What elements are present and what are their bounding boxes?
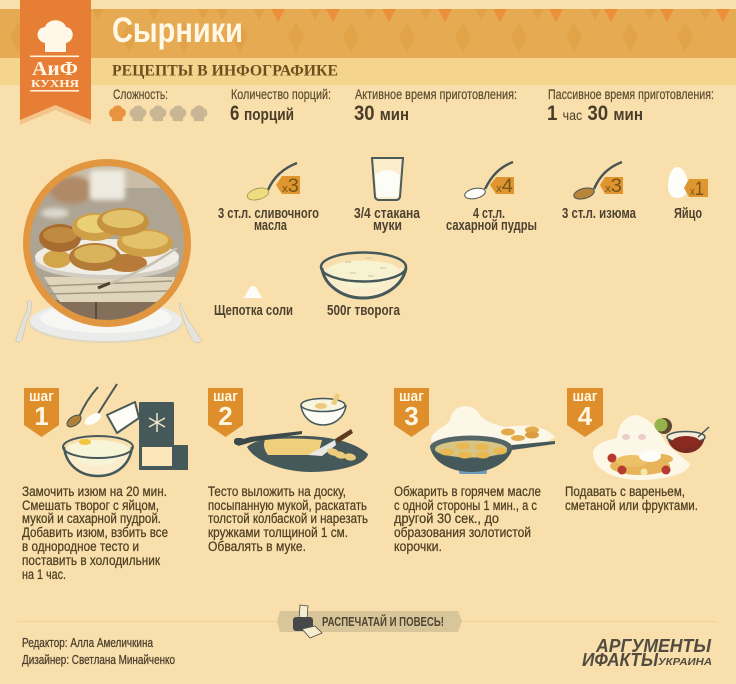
- step 4 flag: [567, 388, 603, 437]
- step 4 flag: 4: [578, 401, 593, 431]
- publisher logo: АРГУМЕНТЫ: [595, 636, 712, 656]
- step 3 text: с одной стороны 1 мин., а с: [394, 498, 537, 513]
- ingredient: bowl of cottage cheese: 500г творога: [327, 303, 401, 319]
- active time: Активное время приготовления:: [355, 86, 517, 102]
- passive time: [547, 86, 714, 125]
- step 4 text: [565, 484, 698, 513]
- ingredient: powdered sugar spoon: 4 ст.л.: [473, 206, 505, 222]
- step 3 flag: шаг: [399, 388, 424, 405]
- designer credit: Дизайнер: Светлана Минайченко: [22, 652, 175, 667]
- ingredient: butter spoon: 3 ст.л. сливочного: [218, 206, 319, 222]
- active time: 30 мин: [354, 102, 409, 125]
- step 3 text: корочки.: [394, 539, 442, 554]
- step 1 text: в однородное тесто и: [22, 539, 139, 554]
- step 1 text: [22, 484, 168, 582]
- step 4 text: сметаной или фруктами.: [565, 498, 698, 513]
- ingredient: powdered sugar spoon: x4: [496, 176, 513, 197]
- servings: 6 порций: [230, 102, 294, 125]
- logo ribbon: AiF kitchen: [20, 0, 91, 125]
- print button: [277, 605, 462, 638]
- difficulty: Сложность:: [113, 86, 168, 102]
- publisher logo: ИФАКТЫ: [582, 650, 659, 670]
- step 1 text: мукой и сахарной пудрой.: [22, 511, 161, 526]
- logo ribbon: AiF kitchen: АиФ: [32, 58, 78, 80]
- ingredient: glass of flour: муки: [373, 218, 402, 234]
- photo: syrniki on a plate in orange ring: [23, 159, 191, 330]
- step 2 flag: 2: [218, 401, 233, 431]
- passive time: 1 час 30 мин: [547, 102, 643, 125]
- step 1 text: Замочить изюм на 20 мин.: [22, 484, 167, 499]
- subtitle: РЕЦЕПТЫ В ИНФОГРАФИКЕ: [112, 62, 338, 80]
- step 2 illustration: [234, 393, 368, 472]
- servings: [230, 86, 331, 125]
- ingredient: butter spoon: масла: [254, 218, 288, 234]
- ingredient: powdered sugar spoon: сахарной пудры: [446, 218, 537, 234]
- step 2 text: посыпанную мукой, раскатать: [208, 498, 367, 513]
- ingredient: butter spoon: [218, 163, 319, 234]
- ingredient: egg: [668, 167, 708, 222]
- step 3 text: Обжарить в горячем масле: [394, 484, 541, 499]
- step 3 text: другой 30 сек., до: [394, 511, 499, 526]
- ingredient: egg: Яйцо: [674, 206, 702, 222]
- step 2 text: Обвалять в муке.: [208, 539, 306, 554]
- header band: [0, 9, 736, 85]
- step 2 flag: [208, 388, 243, 437]
- step 4 flag: шаг: [572, 388, 598, 405]
- ingredient: glass of flour: 3/4 стакана: [354, 206, 421, 222]
- step 2 text: кружками толщиной 1 см.: [208, 525, 348, 540]
- publisher logo: УКРАИНА: [658, 657, 712, 668]
- ingredient: egg: x1: [690, 179, 704, 200]
- title: Сырники: [112, 11, 243, 50]
- step 1 illustration: [63, 384, 188, 476]
- step 1 flag: 1: [34, 401, 49, 431]
- step 4 illustration: [593, 415, 709, 480]
- step 4 text: Подавать с вареньем,: [565, 484, 685, 499]
- step 3 text: [394, 484, 541, 554]
- step 2 flag: шаг: [213, 388, 238, 405]
- step 2 text: Тесто выложить на доску,: [208, 484, 346, 499]
- print button: РАСПЕЧАТАЙ И ПОВЕСЬ!: [322, 614, 444, 629]
- step 3 text: образования золотистой: [394, 525, 531, 540]
- step 1 text: Смешать творог с яйцом,: [22, 498, 159, 513]
- step 1 text: Добавить изюм, взбить все: [22, 525, 168, 540]
- step 1 flag: [24, 388, 59, 437]
- step 3 flag: 3: [404, 401, 419, 431]
- ingredient: bowl of cottage cheese: [321, 252, 406, 319]
- ingredient: pinch of salt: Щепотка соли: [214, 303, 293, 319]
- ingredient: raisin spoon: x3: [605, 176, 622, 197]
- plate with fork and knife: [16, 301, 201, 343]
- ingredient: butter spoon: x3: [282, 176, 299, 197]
- logo ribbon: AiF kitchen: КУХНЯ: [31, 78, 79, 90]
- step 2 text: толстой колбаской и нарезать: [208, 511, 368, 526]
- ingredient: glass of flour: [354, 158, 421, 234]
- ingredient: raisin spoon: 3 ст.л. изюма: [562, 206, 637, 222]
- step 3 flag: [394, 388, 429, 437]
- ingredient: powdered sugar spoon: [446, 162, 537, 234]
- editor credit: Редактор: Алла Амеличкина: [22, 635, 154, 650]
- ingredient: pinch of salt: [214, 286, 293, 319]
- ingredient: raisin spoon: [562, 162, 637, 222]
- active time: [354, 86, 517, 125]
- step 2 text: [208, 484, 368, 554]
- step 3 illustration: [430, 406, 555, 474]
- step 1 text: поставить в холодильник: [22, 553, 160, 568]
- difficulty: [109, 86, 207, 121]
- publisher logo: [582, 636, 712, 670]
- step 1 flag: шаг: [29, 388, 54, 405]
- servings: Количество порций:: [231, 86, 331, 102]
- step 1 text: на 1 час.: [22, 567, 66, 582]
